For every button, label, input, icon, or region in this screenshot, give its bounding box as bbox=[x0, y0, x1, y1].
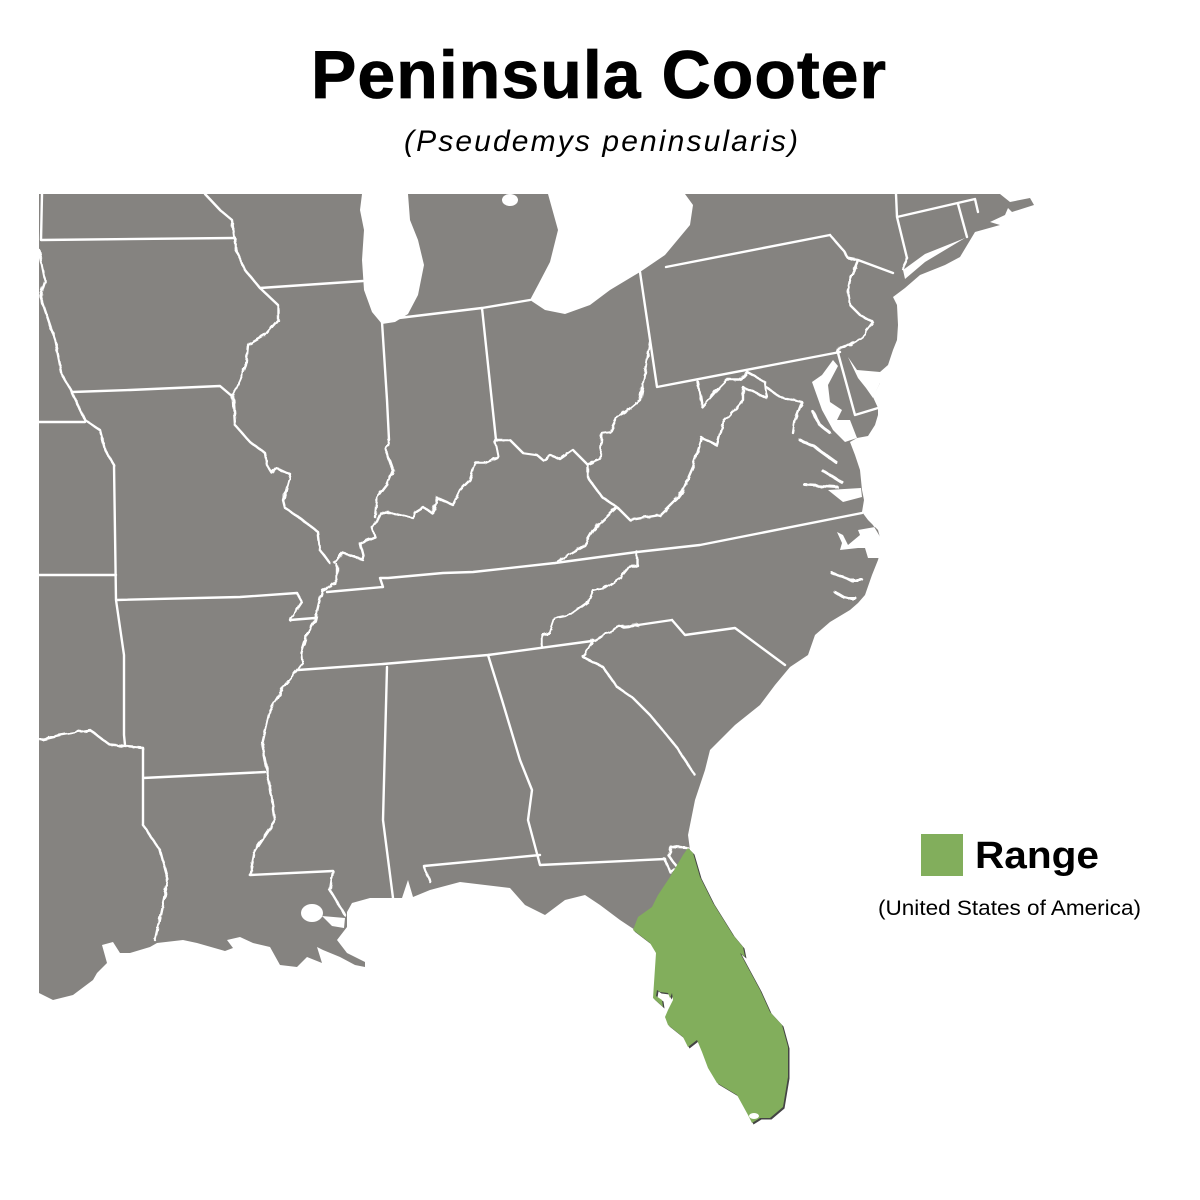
Florida Bay notch bbox=[749, 1113, 759, 1119]
legend swatch bbox=[921, 834, 963, 876]
inland waters and bays bbox=[301, 194, 965, 928]
state borders: straight lines bbox=[39, 194, 978, 898]
tidal rivers bbox=[800, 412, 862, 598]
state borders: rivers bbox=[39, 194, 907, 940]
legend bbox=[878, 834, 1141, 920]
land silhouette bbox=[39, 194, 1034, 1010]
legend note: (United States of America) bbox=[878, 897, 1141, 920]
subtitle: scientific name: (Pseudemys peninsularis) bbox=[404, 125, 798, 158]
legend label: Range bbox=[975, 835, 1099, 877]
title: Peninsula Cooter bbox=[311, 37, 886, 113]
Florida range shadow bbox=[634, 850, 790, 1124]
range: Florida peninsula bbox=[633, 848, 788, 1123]
map: eastern United States bbox=[39, 194, 1034, 1124]
